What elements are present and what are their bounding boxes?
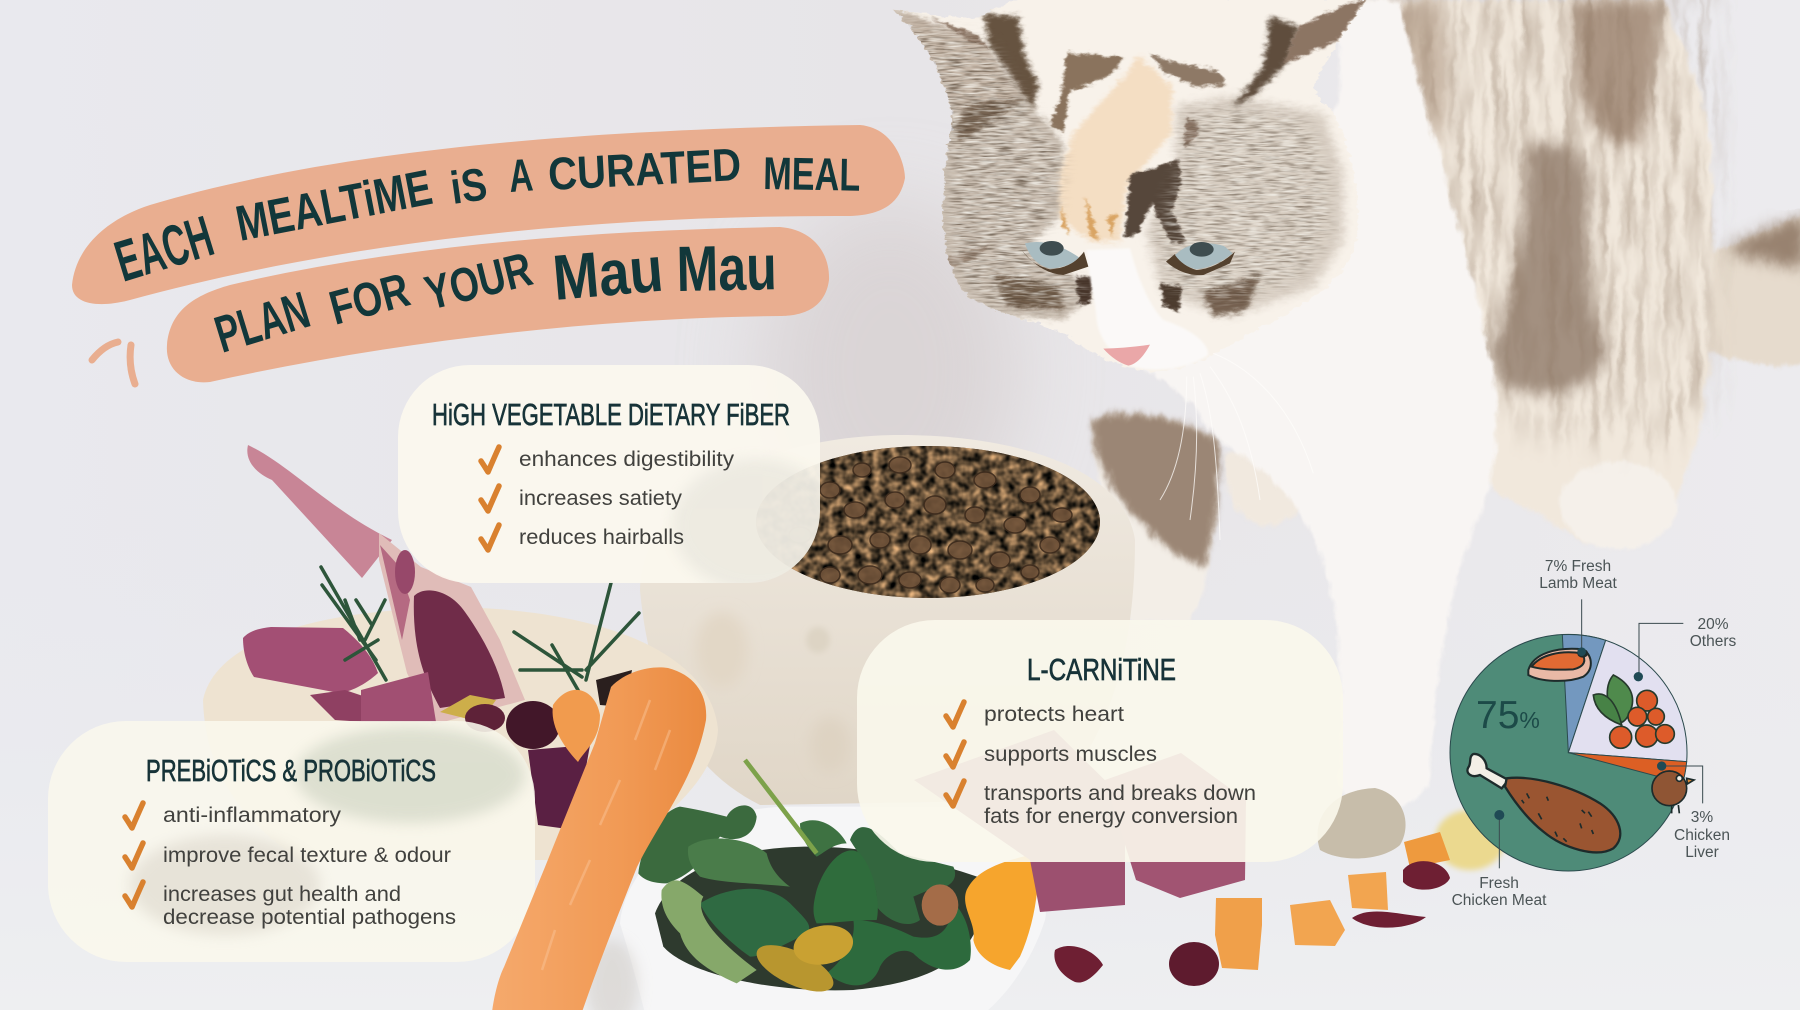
- marker dots: [1494, 647, 1666, 820]
- label: chicken meat: [1452, 875, 1547, 909]
- label: lamb meat: 7% Fresh: [1545, 558, 1611, 575]
- forehead blaze: [1058, 55, 1172, 242]
- ear and cheek grey: [890, 7, 1093, 320]
- checklist: fiber: reduces hairballs: [519, 526, 684, 549]
- dark center stripes: [1125, 160, 1185, 243]
- kibble: [756, 446, 1100, 598]
- label: lamb meat: Lamb Meat: [1539, 575, 1617, 592]
- icon: chicken: [1652, 771, 1694, 813]
- bowl body: [620, 807, 1046, 1010]
- leader lines: [1499, 599, 1703, 868]
- checklist: prebiotics: decrease potential pathogens: [163, 906, 456, 929]
- label: chicken meat: Fresh: [1479, 875, 1519, 892]
- heading: fiber: HiGH VEGETABLE DiETARY FiBER: [432, 397, 790, 432]
- whiskers: [1160, 353, 1313, 540]
- muzzle: [1087, 248, 1208, 370]
- checklist: fiber: [481, 447, 735, 550]
- title line 2: [209, 231, 777, 364]
- ear stripes: [983, 13, 1038, 110]
- title line 2: Mau: [550, 233, 666, 314]
- checklist: prebiotics: improve fecal texture & odour: [163, 844, 451, 867]
- checklist: l-carnitine: supports muscles: [984, 743, 1157, 766]
- title line 1: A: [507, 148, 535, 202]
- nose: [1103, 345, 1150, 366]
- label: chicken liver: [1674, 809, 1730, 861]
- pie value: 75%: 75%: [1476, 694, 1540, 737]
- title line 1: [108, 138, 861, 294]
- ingredient pie chart: [1450, 558, 1737, 909]
- checklist: l-carnitine: transports and breaks down: [984, 782, 1256, 805]
- checklist: prebiotics: anti-inflammatory: [163, 804, 342, 827]
- heading: l-carnitine: L-CARNiTiNE: [1027, 652, 1176, 687]
- checklist: prebiotics: increases gut health and: [163, 883, 401, 906]
- title line 2: YOUR: [420, 243, 537, 321]
- cranberries: [1403, 861, 1450, 890]
- spinach leaves: [638, 805, 971, 985]
- stem: [745, 760, 817, 853]
- checklist: l-carnitine: fats for energy conversion: [984, 805, 1238, 828]
- icon: spinach and tomatoes: [1593, 675, 1674, 748]
- squash slice: [965, 853, 1039, 970]
- label: chicken liver: Liver: [1685, 844, 1719, 861]
- label: chicken liver: Chicken: [1674, 827, 1730, 844]
- cat: [890, 0, 1800, 811]
- small carrot: [553, 690, 600, 762]
- checklist: l-carnitine: protects heart: [984, 703, 1124, 726]
- label: chicken meat: Chicken Meat: [1452, 892, 1547, 909]
- label: others: [1690, 616, 1737, 650]
- title line 1: EACH: [108, 204, 221, 294]
- heading: prebiotics: PREBiOTiCS & PROBiOTiCS: [146, 753, 436, 788]
- food bowl with kibble: [640, 435, 1135, 805]
- cat far foreleg: [1092, 414, 1312, 622]
- panel: prebiotics and probiotics: [48, 721, 535, 962]
- label: others: Others: [1690, 633, 1737, 650]
- title band 2: [167, 227, 829, 382]
- couscous: [1435, 810, 1505, 870]
- title banner: [72, 125, 905, 384]
- title line 2: FOR: [324, 264, 415, 336]
- cat body: [1360, 0, 1720, 549]
- raw meat cubes: [914, 730, 1125, 912]
- decorative accent marks: [92, 342, 135, 384]
- checklist: prebiotics: [125, 803, 456, 929]
- cat chest and front leg: [1130, 0, 1497, 811]
- brow and forehead marks: [1050, 53, 1123, 133]
- under-eye patches: [993, 273, 1063, 310]
- carrot shadow: [586, 940, 638, 1010]
- title line 1: MEAL: [763, 147, 861, 201]
- eyes: [1022, 241, 1235, 275]
- lamb chop: [247, 445, 525, 725]
- title line 1: CURATED: [547, 138, 742, 200]
- title line 2: Mau: [676, 231, 777, 305]
- head fur: [890, 0, 1367, 371]
- label: chicken liver: 3%: [1691, 809, 1713, 826]
- floor scraps: [914, 730, 1505, 986]
- paw stone: [1317, 788, 1406, 858]
- title line 2: PLAN: [209, 281, 316, 364]
- cat head: [890, 0, 1367, 540]
- title line 1: MEALTiME: [231, 159, 436, 252]
- checklist: l-carnitine: [946, 702, 1256, 828]
- checklist: fiber: enhances digestibility: [519, 448, 735, 471]
- label: lamb meat: [1539, 558, 1617, 592]
- icon: chicken drumstick: [1467, 754, 1620, 852]
- squash cubes: [1404, 832, 1450, 868]
- cat tail: [1690, 216, 1800, 366]
- rosemary: [321, 567, 639, 690]
- salad bowl: [620, 760, 1046, 1010]
- title line 1: iS: [447, 157, 490, 214]
- pie slices: [1450, 634, 1687, 871]
- panel: high vegetable dietary fiber: [398, 365, 837, 591]
- capsules: [750, 921, 856, 1001]
- meat bowl: [203, 445, 718, 860]
- title band 1: [72, 125, 905, 304]
- fur grain: [903, 20, 1330, 310]
- acorn: [922, 884, 958, 926]
- panel: l-carnitine: [857, 620, 1343, 862]
- label: others: 20%: [1697, 616, 1729, 633]
- raw meat chunks: [243, 627, 436, 722]
- berries and beans: [440, 670, 632, 830]
- carrot: [492, 667, 706, 1010]
- icon: lamb steak: [1528, 649, 1591, 681]
- checklist: fiber: increases satiety: [519, 487, 683, 510]
